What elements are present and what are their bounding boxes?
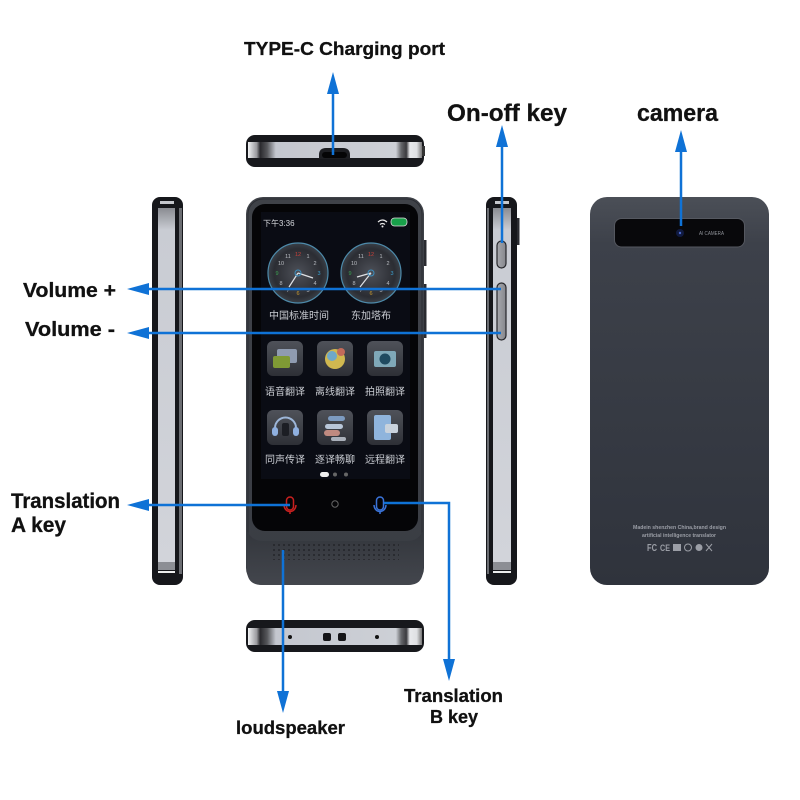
device: front phone — [246, 197, 426, 585]
arrow: translation B — [384, 503, 449, 660]
app: voice translate — [265, 341, 305, 398]
speaker grille — [272, 543, 399, 560]
clock left — [268, 243, 328, 303]
clock right: 3 — [390, 271, 394, 277]
label: on-off key: On-off key — [447, 100, 568, 127]
clock right: 5 — [379, 288, 383, 294]
app: voice translate: 语音翻译 — [265, 385, 305, 398]
clock left: 5 — [306, 288, 310, 294]
app: remote translate: 远程翻译 — [365, 454, 405, 466]
speaker chin — [247, 530, 423, 585]
app: offline translate: 离线翻译 — [315, 385, 355, 398]
certification marks — [647, 543, 712, 554]
arrow: volume down — [148, 332, 501, 334]
app: photo translate — [365, 341, 405, 398]
clock right: 6 — [369, 291, 373, 297]
clock labels: 东加塔布 — [351, 309, 391, 322]
arrow: camera — [680, 151, 682, 226]
clock right: 8 — [352, 281, 356, 287]
clock left: 11 — [285, 254, 291, 260]
device: top edge view — [246, 135, 425, 167]
app: remote translate — [365, 410, 405, 466]
device: back of phone — [590, 197, 769, 585]
clock right: 4 — [386, 281, 390, 287]
clock right: 10 — [351, 261, 357, 267]
clock labels — [269, 309, 391, 322]
mic B blue — [374, 497, 386, 514]
page dots — [320, 472, 348, 477]
app: offline translate — [315, 341, 355, 398]
clock left: 10 — [278, 261, 284, 267]
arrow: volume up — [148, 288, 501, 290]
clock left: 3 — [317, 271, 321, 277]
label: loudspeaker: loudspeaker — [236, 718, 345, 738]
clock right: 7 — [359, 288, 363, 294]
clock right: 2 — [386, 261, 390, 267]
label: translation A key — [11, 490, 120, 537]
label: volume -: Volume - — [25, 319, 115, 341]
label: translation B key: B key — [430, 707, 478, 727]
clock right: 1 — [379, 254, 383, 260]
arrow: on-off key — [501, 146, 503, 243]
label: camera: camera — [637, 100, 719, 127]
app: chat translate — [315, 410, 355, 466]
front glass — [252, 204, 418, 531]
label: translation B key — [404, 686, 503, 727]
back print: artificial intelligence translator — [642, 533, 717, 539]
AI camera label: AI CAMERA — [699, 231, 725, 237]
clock right: 9 — [348, 271, 352, 277]
clock right: 12 — [368, 252, 374, 258]
camera module — [614, 218, 744, 247]
arrow: TYPE-C — [332, 93, 334, 155]
display — [261, 212, 410, 479]
clock right — [341, 243, 401, 303]
certification marks: FC — [647, 543, 657, 554]
clock right: 11 — [358, 254, 364, 260]
device: bottom edge view — [246, 620, 424, 652]
app: photo translate: 拍照翻译 — [365, 385, 405, 398]
app: simultaneous translate: 同声传译 — [265, 453, 305, 466]
label: translation A key: Translation — [11, 490, 120, 513]
clock left: 1 — [306, 254, 310, 260]
clock left: 7 — [286, 288, 290, 294]
clock labels: 中国标准时间 — [269, 309, 329, 322]
arrow: loudspeaker — [282, 550, 284, 692]
device: right side view with buttons — [486, 197, 520, 585]
label: volume +: Volume + — [23, 280, 116, 302]
label: translation A key: A key — [11, 514, 66, 537]
back print: Madein shenzhen China,brand design — [633, 525, 727, 531]
arrow: translation A — [148, 504, 290, 506]
device: left side view — [152, 197, 183, 585]
mic A red — [284, 497, 296, 514]
clock left: 9 — [275, 271, 279, 277]
app: chat translate: 逐译畅聊 — [315, 453, 355, 466]
status bar: 下午3:36 — [263, 218, 295, 228]
home button — [332, 501, 338, 507]
status bar — [263, 218, 407, 228]
clock left: 2 — [313, 261, 317, 267]
clock left: 12 — [295, 252, 301, 258]
clock left: 4 — [313, 281, 317, 287]
clock left: 6 — [296, 291, 300, 297]
label: TYPE-C: TYPE-C Charging port — [244, 38, 445, 59]
certification marks: CE — [660, 543, 670, 553]
back print — [633, 525, 727, 539]
label: translation B key: Translation — [404, 686, 503, 706]
app: simultaneous translate — [265, 410, 305, 466]
clock left: 8 — [279, 281, 283, 287]
